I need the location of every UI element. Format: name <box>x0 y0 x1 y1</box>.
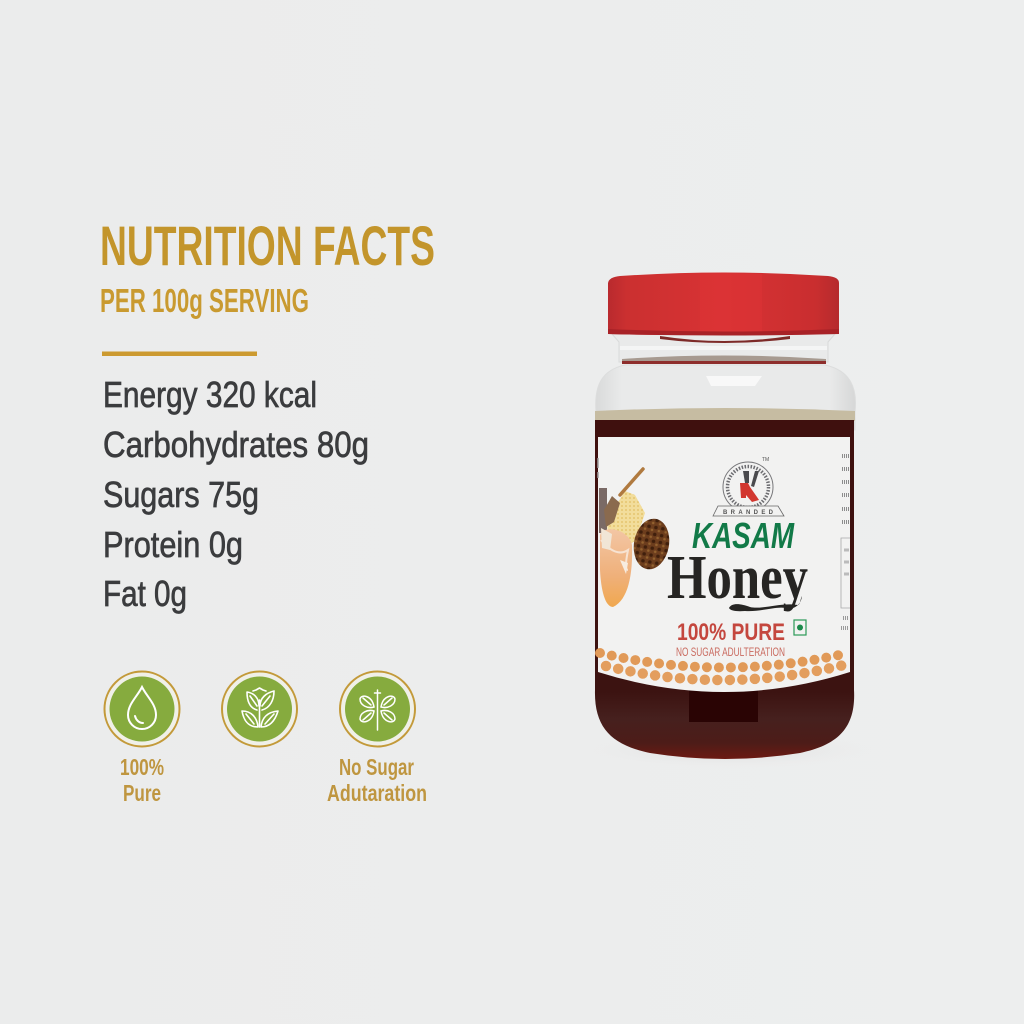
honey illustration <box>599 469 673 607</box>
energy row: Energy 320 kcal <box>103 374 317 415</box>
logo banner <box>713 506 784 516</box>
icon: flowering plant <box>242 688 278 727</box>
label: no sugar adulteration: Adutaration <box>327 780 427 806</box>
subtitle: per 100g serving: PER 100g SERVING <box>100 282 309 319</box>
sugars row: Sugars 75g <box>103 474 259 515</box>
heading divider <box>102 352 257 356</box>
honey glass <box>600 528 632 607</box>
honey foam line <box>595 408 855 421</box>
label: 100% pure: 100% <box>120 754 164 780</box>
label: no sugar adulteration <box>327 754 427 806</box>
label honeycomb band <box>600 653 848 680</box>
glass highlight <box>706 376 762 386</box>
label: 100% pure: Pure <box>123 780 161 806</box>
jar shadow <box>583 732 873 768</box>
red lid <box>608 272 839 336</box>
protein row: Protein 0g <box>103 524 243 565</box>
icon: water drop <box>128 687 156 729</box>
grey comb slab <box>599 488 607 533</box>
honey swash <box>729 596 802 611</box>
honey dipper <box>604 469 643 527</box>
icon: four leaves <box>360 690 395 730</box>
label side information <box>598 456 850 628</box>
honeycomb <box>607 491 645 552</box>
honey body <box>595 420 854 759</box>
brand name: kasam: KASAM <box>692 515 795 556</box>
fat row: Fat 0g <box>103 573 187 614</box>
title: nutrition facts: NUTRITION FACTS <box>100 214 435 277</box>
jar shoulder glass <box>596 365 856 430</box>
badge: plant <box>222 672 297 746</box>
honey center reflection <box>689 690 758 722</box>
bran cake <box>630 516 673 572</box>
honey jar <box>583 272 873 768</box>
product label <box>598 437 850 692</box>
nutrition list <box>103 374 369 614</box>
claim: 100% pure: 100% PURE <box>677 619 785 646</box>
jar neck <box>612 334 835 364</box>
brand logo <box>713 457 784 516</box>
logo trademark: TM <box>762 457 769 463</box>
label: 100% pure <box>120 754 164 806</box>
badge: 100% pure <box>104 672 180 806</box>
badge: no sugar adulteration <box>327 672 427 806</box>
carbohydrates row: Carbohydrates 80g <box>103 424 369 465</box>
logo mark K <box>740 483 759 502</box>
vegetarian mark <box>794 620 806 635</box>
brand logo: BRANDED <box>723 510 774 516</box>
product name: honey: Honey <box>667 544 808 612</box>
label: no sugar adulteration: No Sugar <box>339 754 414 780</box>
claim: no sugar adulteration: NO SUGAR ADULTERATION <box>676 645 785 659</box>
